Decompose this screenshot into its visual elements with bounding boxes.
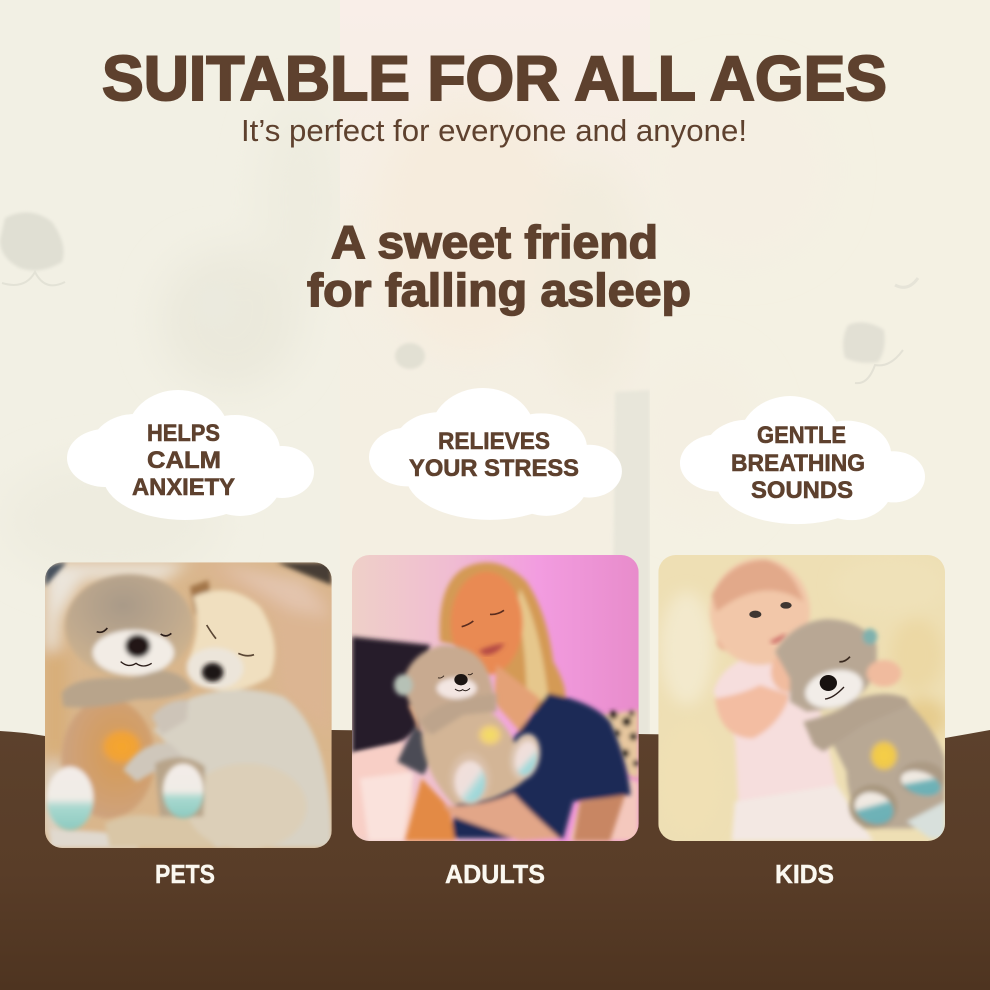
panel: faded right otter and baby (844, 278, 919, 384)
heading: sweet friend (307, 216, 691, 316)
otter face details (97, 628, 171, 666)
cloud: helps calm anxiety: HELPS (147, 420, 220, 447)
heading: sweet friend: for falling asleep (307, 264, 691, 316)
cloud: gentle breathing sounds: GENTLE (757, 422, 846, 449)
otter plush (775, 619, 945, 838)
cloud: relieves your stress: YOUR STRESS (409, 455, 579, 482)
otter plush (47, 574, 193, 830)
label: adults: ADULTS (445, 859, 545, 889)
baby (710, 558, 873, 841)
background: three faded photo panels (0, 212, 919, 734)
cloud: relieves your stress (369, 388, 622, 520)
subtitle: It’s perfect for everyone and anyone! (241, 113, 747, 148)
panel: faded left otter (0, 212, 66, 286)
photo: baby with otter (658, 555, 947, 841)
otter plush (394, 645, 544, 806)
heading: sweet friend: A sweet friend (331, 216, 658, 268)
cloud: helps calm anxiety (67, 390, 314, 520)
brown lower band (0, 730, 990, 990)
photo: otter with puppy (45, 562, 332, 850)
leopard pillow (602, 710, 639, 778)
bed (352, 742, 420, 838)
cloud: gentle breathing sounds (680, 396, 925, 524)
cloud: relieves your stress: RELIEVES (438, 428, 550, 455)
photo: woman hugging otter (352, 555, 639, 841)
panel: faded centre portrait (395, 343, 648, 734)
label: pets: PETS (155, 859, 215, 889)
bottom blanket (50, 828, 143, 848)
headboard (352, 637, 430, 753)
label: kids: KIDS (775, 859, 834, 889)
title: SUITABLE FOR ALL AGES (102, 44, 887, 114)
cloud: helps calm anxiety: CALM (147, 447, 221, 474)
woman (397, 562, 631, 841)
cloud: gentle breathing sounds: SOUNDS (751, 477, 853, 504)
cloud: gentle breathing sounds: BREATHING (731, 450, 865, 477)
puppy (105, 580, 332, 850)
cloud: helps calm anxiety: ANXIETY (132, 474, 235, 501)
